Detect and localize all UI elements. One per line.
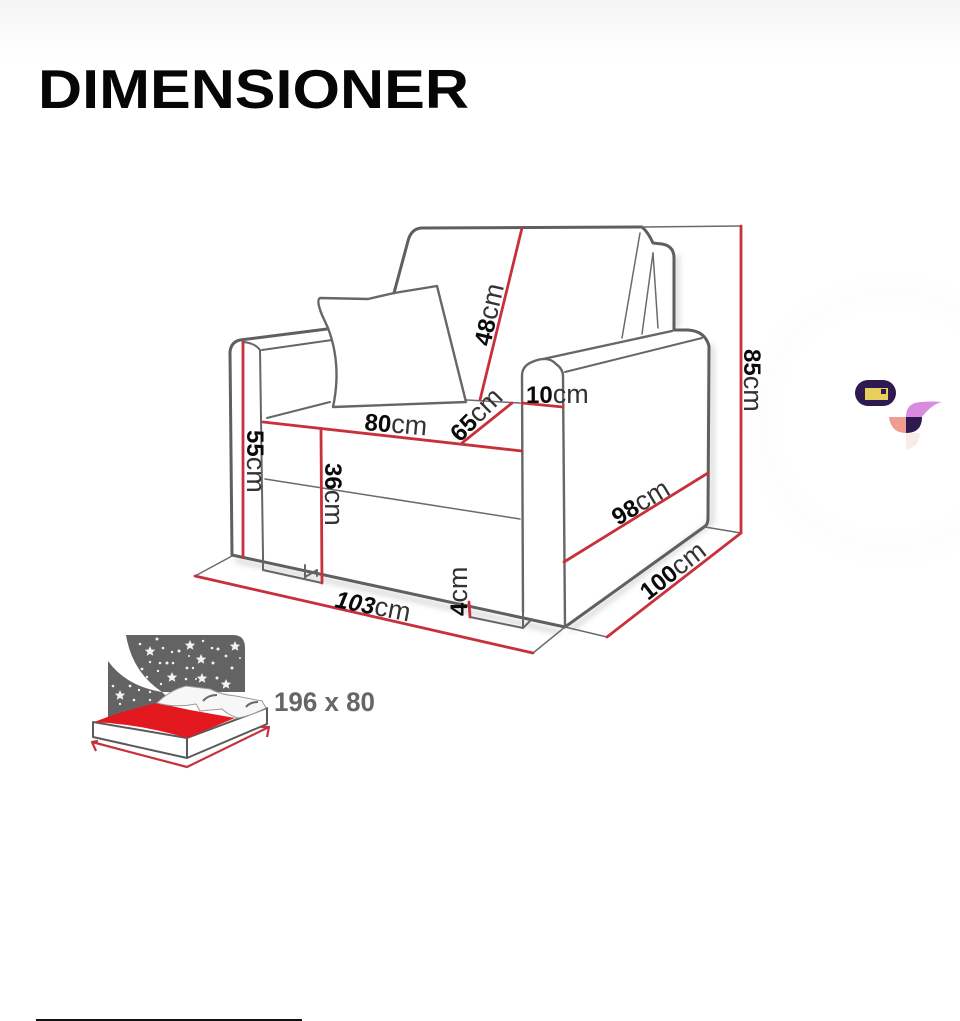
mattress [93, 708, 267, 758]
bird [906, 402, 942, 417]
night sky [125, 635, 245, 692]
floor guide lines [195, 226, 741, 653]
pillows and blanket [157, 686, 266, 718]
label 55cm: 55 cm [241, 430, 271, 493]
right foot [470, 613, 530, 628]
label 100cm: 100cm [633, 535, 712, 606]
label 4cm: 4cm [443, 567, 473, 616]
chair outer outline [230, 227, 709, 627]
armchair dimension drawing [195, 226, 768, 653]
badge [855, 380, 896, 406]
title: DIMENSIONER [38, 58, 469, 120]
label 36cm: 36 cm [319, 463, 349, 526]
left armrest [243, 340, 332, 556]
cushion [318, 286, 466, 407]
label 98cm: 98cm [606, 473, 675, 531]
soft shadows [235, 255, 712, 632]
watermark logo [855, 380, 942, 450]
label 10cm: 10cm [526, 379, 589, 409]
left foot [263, 556, 322, 583]
right armrest [522, 331, 702, 626]
label 85cm: 85 cm [738, 349, 768, 412]
bottom rule [36, 1019, 302, 1021]
red measure lines [195, 226, 741, 653]
backrest fold lines [622, 233, 658, 338]
seat edges [265, 400, 520, 519]
label 48cm: 48cm [467, 281, 510, 348]
red size arrows [92, 727, 269, 767]
label 80cm: 80cm [363, 406, 429, 441]
label 65cm: 65cm [443, 382, 509, 447]
red sheet [94, 703, 235, 738]
label 103cm: 103cm [333, 583, 413, 627]
bed icon [92, 635, 375, 767]
stars [112, 638, 241, 705]
bed size label: 196 x 80 [274, 687, 375, 717]
